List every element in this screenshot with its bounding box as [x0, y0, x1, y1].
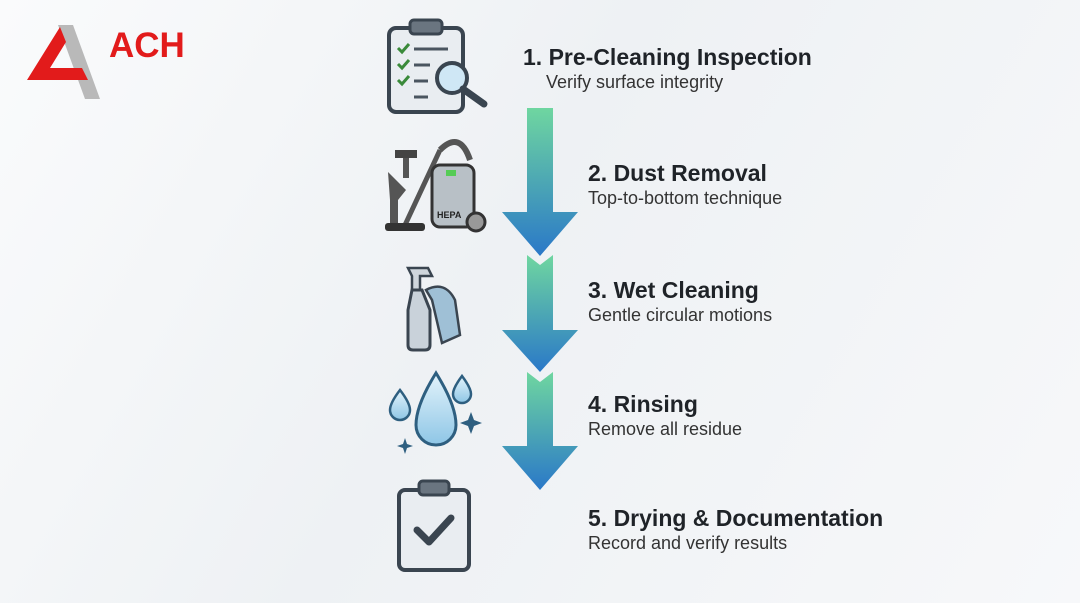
icon: checklist clipboard — [399, 481, 469, 570]
icon: vacuum: HEPA — [437, 210, 462, 220]
step 1 text — [523, 44, 812, 92]
step 4 text: 4. Rinsing — [588, 391, 698, 417]
step 1 text: 1. Pre-Cleaning Inspection — [523, 44, 812, 70]
arrow 2 — [502, 255, 578, 372]
step 2 text: 2. Dust Removal — [588, 160, 767, 186]
step 3 text — [588, 277, 772, 325]
step 5 text: Record and verify results — [588, 533, 787, 553]
step 5 text: 5. Drying & Documentation — [588, 505, 883, 531]
arrow 3 — [502, 372, 578, 490]
step 5 text — [588, 505, 883, 553]
icon: water drops — [390, 373, 482, 454]
logo — [27, 25, 185, 99]
step 2 text — [588, 160, 782, 208]
icon: vacuum — [385, 142, 485, 231]
icon: spray bottle — [408, 268, 460, 350]
logo: ACH — [109, 26, 185, 65]
step 4 text — [588, 391, 742, 439]
step 3 text: Gentle circular motions — [588, 305, 772, 325]
arrow 1 — [502, 108, 578, 256]
step 2 text: Top-to-bottom technique — [588, 188, 782, 208]
step 1 text: Verify surface integrity — [546, 72, 723, 92]
step 4 text: Remove all residue — [588, 419, 742, 439]
step 3 text: 3. Wet Cleaning — [588, 277, 759, 303]
icon: clipboard inspection — [389, 20, 484, 112]
